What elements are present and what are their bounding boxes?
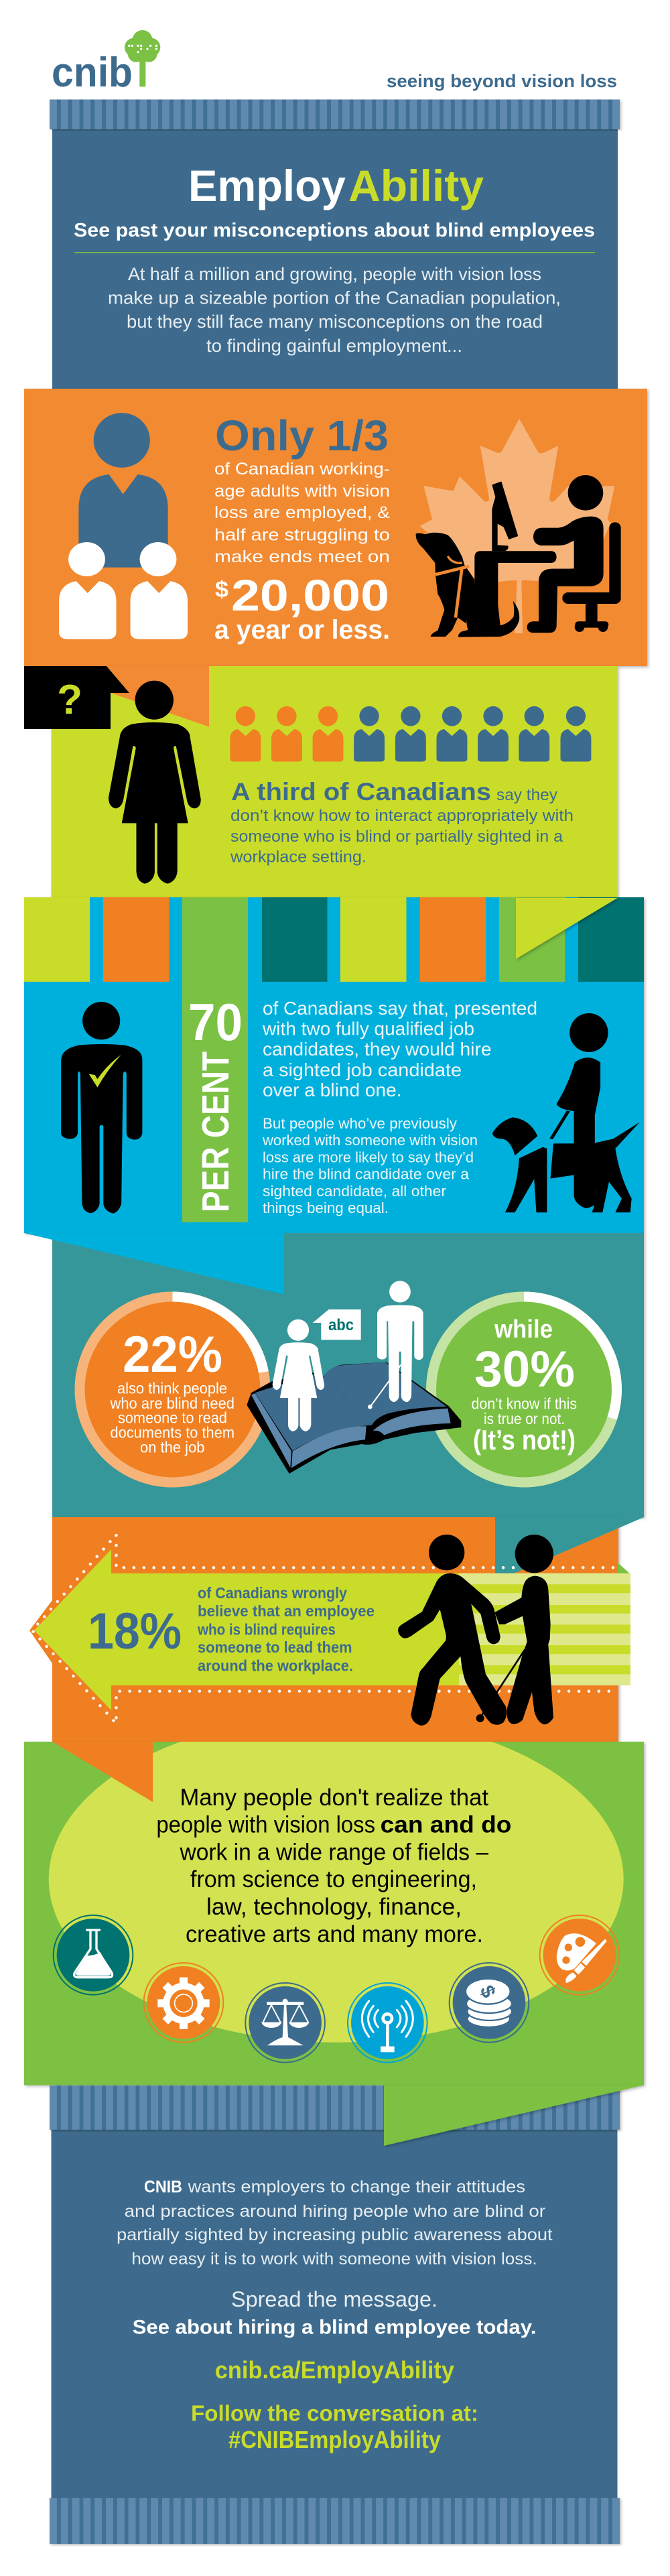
stat circle: 30%: (It’s not!) (473, 1424, 576, 1456)
text: CNIB wants employers: and practices around hiring people who are blind or (125, 2202, 545, 2221)
stat circle: 30%: 30% (474, 1341, 575, 1398)
title (188, 161, 484, 210)
figure: 70 per cent: 70 (188, 992, 243, 1051)
text: hiring preference: a sighted job candidate (263, 1059, 462, 1080)
panel: intro (50, 99, 620, 389)
title: Employ (188, 161, 346, 210)
hashtag: follow the conversation: #CNIBEmployAbility (228, 2426, 441, 2453)
text: spread the message: See about hiring a blind employee today. (133, 2317, 536, 2339)
text: CNIB wants employers (117, 2178, 553, 2268)
text: a third of Canadians: say they (496, 786, 557, 804)
stat circle: 22%: documents to them (110, 1424, 234, 1441)
icon: man with guide dog (492, 1013, 640, 1212)
panel: can and do (24, 1716, 644, 2085)
text: people who have worked with someone: things being equal. (263, 1200, 389, 1216)
panel: call to action (50, 2085, 644, 2544)
text: can and do: Many people don't realize that (180, 1785, 488, 1811)
callout tail from blue panel (24, 1233, 284, 1295)
speech ellipse (49, 1716, 624, 2043)
text: hiring preference: of Canadians say that, presented (263, 998, 537, 1019)
stripe band under green panel (50, 2085, 620, 2130)
panel: 18 per cent (29, 1517, 644, 1742)
text: can and do (156, 1785, 511, 1947)
text: a third of Canadians: don’t know how to interact appropriately with (230, 807, 574, 825)
panel: only one third employed (24, 389, 647, 666)
link: cnib.ca/EmployAbility: cnib.ca/EmployAbility (215, 2356, 454, 2384)
text: a third of Canadians: workplace setting. (230, 848, 366, 866)
text: people who have worked with someone (262, 1115, 478, 1216)
icon: arts palette (540, 1915, 619, 1995)
text: a third of Canadians: A third of Canadians (231, 778, 491, 806)
text: employment statistic: age adults with vision (214, 482, 390, 501)
icon: three people, one highlighted (59, 413, 188, 639)
icon: science flask (54, 1915, 133, 1995)
text: employment statistic: loss are employed, & (214, 503, 390, 522)
hashtag: follow the conversation (191, 2400, 478, 2453)
text: hiring preference: candidates, they would hire (263, 1039, 492, 1059)
figure: 70 per cent (188, 992, 243, 1212)
headline: only 1/3: Only 1/3 (215, 411, 389, 460)
icon: white man with cane (368, 1281, 423, 1409)
logo wordmark: cnib (52, 50, 133, 96)
subtitle: See past your misconceptions about blind employees (74, 220, 595, 241)
text: a third of Canadians (230, 778, 574, 866)
stat circle: 22%: someone to read (118, 1409, 227, 1427)
figure: $20,000 a year or less (214, 570, 390, 645)
title: Ability (348, 161, 484, 210)
icon: finance coins (450, 1963, 529, 2043)
icon: woman (109, 681, 201, 884)
text: wrongly believe: who is blind requires (197, 1620, 336, 1638)
text: employment statistic: make ends meet on (214, 548, 390, 566)
text: wrongly believe: believe that an employee (198, 1602, 375, 1620)
callout tail from orange panel (52, 1742, 153, 1802)
icon: man with check mark (61, 1002, 142, 1214)
tagline: seeing beyond vision loss (387, 71, 617, 91)
text: can and do: can and do (381, 1812, 511, 1838)
figure: 70 per cent: PER CENT (194, 1051, 237, 1212)
intro text: make up a sizeable portion of the Canadian population, (108, 288, 561, 308)
stat circle: 22%: on the job (140, 1439, 205, 1456)
icon: finance coins: $ (475, 1982, 500, 2001)
text: wrongly believe: of Canadians wrongly (198, 1584, 347, 1602)
icon: open book (247, 1362, 461, 1474)
speech bubble: abc (313, 1309, 361, 1340)
text: employment statistic: half are struggling to (214, 525, 390, 544)
text: employment statistic: of Canadian working- (214, 460, 390, 478)
top stripe band (50, 99, 620, 129)
text: wrongly believe (197, 1584, 375, 1674)
stat circle: 22%: who are blind need (110, 1395, 234, 1412)
icon: maple leaf with worker at desk and guide dog (416, 419, 621, 637)
text: can and do: work in a wide range of fields – (180, 1840, 488, 1866)
text: CNIB wants employers: wants employers to change their attitudes (188, 2178, 525, 2197)
speech bubble: abc: abc (328, 1316, 354, 1334)
question speech bubble: ? (57, 677, 82, 723)
icon: engineering gear (144, 1963, 223, 2043)
pictogram: three of nine people (230, 706, 591, 762)
text: wrongly believe: around the workplace. (198, 1657, 353, 1674)
text: people who have worked with someone: loss are more likely to say they’d (263, 1149, 474, 1166)
text: can and do: people with vision loss (156, 1812, 375, 1838)
figure: $20,000 a year or less: a year or less. (214, 615, 390, 645)
text: hiring preference: over a blind one. (263, 1080, 402, 1100)
stat circle: 22%: 22% (123, 1326, 222, 1383)
callout tail from lime panel (516, 898, 618, 959)
stat circle: 30%: don’t know if this (472, 1395, 577, 1413)
text: wrongly believe: someone to lead them (198, 1638, 352, 1656)
arrow: lime left-pointing banner (32, 1535, 630, 1724)
panel: 70 per cent (24, 897, 644, 1233)
intro text: At half a million and growing, people with vision loss (128, 264, 541, 284)
callout tail from teal panel (495, 1517, 644, 1582)
text: people who have worked with someone: sighted candidate, all other (263, 1183, 446, 1200)
text: can and do: law, technology, finance, (206, 1894, 462, 1920)
text: hiring preference: with two fully qualified job (262, 1018, 474, 1039)
text: a third of Canadians: someone who is blind or partially sighted in a (230, 828, 563, 846)
figure: $20,000 a year or less: 20,000 (231, 570, 389, 620)
text: people who have worked with someone: hire the blind candidate over a (263, 1166, 470, 1182)
stat circle: 30%: is true or not. (484, 1410, 565, 1427)
icon: white woman on book (273, 1319, 324, 1431)
text: spread the message (133, 2287, 536, 2339)
figure: 18%: 18% (88, 1603, 182, 1660)
icon: two people walking with cane (398, 1535, 553, 1726)
callout tail from green panel (384, 2085, 644, 2146)
text: spread the message: Spread the message. (231, 2287, 438, 2311)
callout tail from orange panel (107, 666, 209, 726)
stat circle: 30% (426, 1292, 622, 1488)
stat circle: 22% (75, 1292, 271, 1488)
stat circle: 30%: while (494, 1315, 553, 1344)
text: can and do: from science to engineering, (190, 1866, 477, 1892)
stat circle: 22%: also think people (117, 1380, 227, 1397)
icon: technology antenna (348, 1983, 427, 2063)
question speech bubble (24, 666, 129, 729)
hashtag: follow the conversation: Follow the conversation at: (191, 2400, 478, 2425)
intro text (108, 264, 561, 356)
bottom stripe band (50, 2498, 620, 2544)
icon: braille tree (125, 30, 160, 86)
text: CNIB wants employers: how easy it is to work with someone with vision loss. (131, 2250, 537, 2268)
text: can and do: creative arts and many more. (186, 1921, 483, 1947)
panel: reading documents (24, 1233, 644, 1517)
logo: cnib (52, 30, 160, 96)
colour stripes (24, 897, 644, 1222)
text: people who have worked with someone: But people who’ve previously (263, 1115, 457, 1132)
intro text: to finding gainful employment... (206, 336, 462, 356)
text: employment statistic (214, 460, 390, 566)
text: CNIB wants employers: CNIB (144, 2178, 182, 2197)
text: CNIB wants employers: partially sighted by increasing public awareness about (117, 2226, 553, 2244)
text: hiring preference (262, 998, 537, 1100)
icon: law scales (245, 1983, 325, 2063)
text: people who have worked with someone: worked with someone with vision (262, 1132, 478, 1149)
intro text: but they still face many misconceptions on the road (127, 312, 543, 332)
panel: a third of Canadians (24, 666, 618, 898)
figure: $20,000 a year or less: $ (215, 577, 228, 602)
